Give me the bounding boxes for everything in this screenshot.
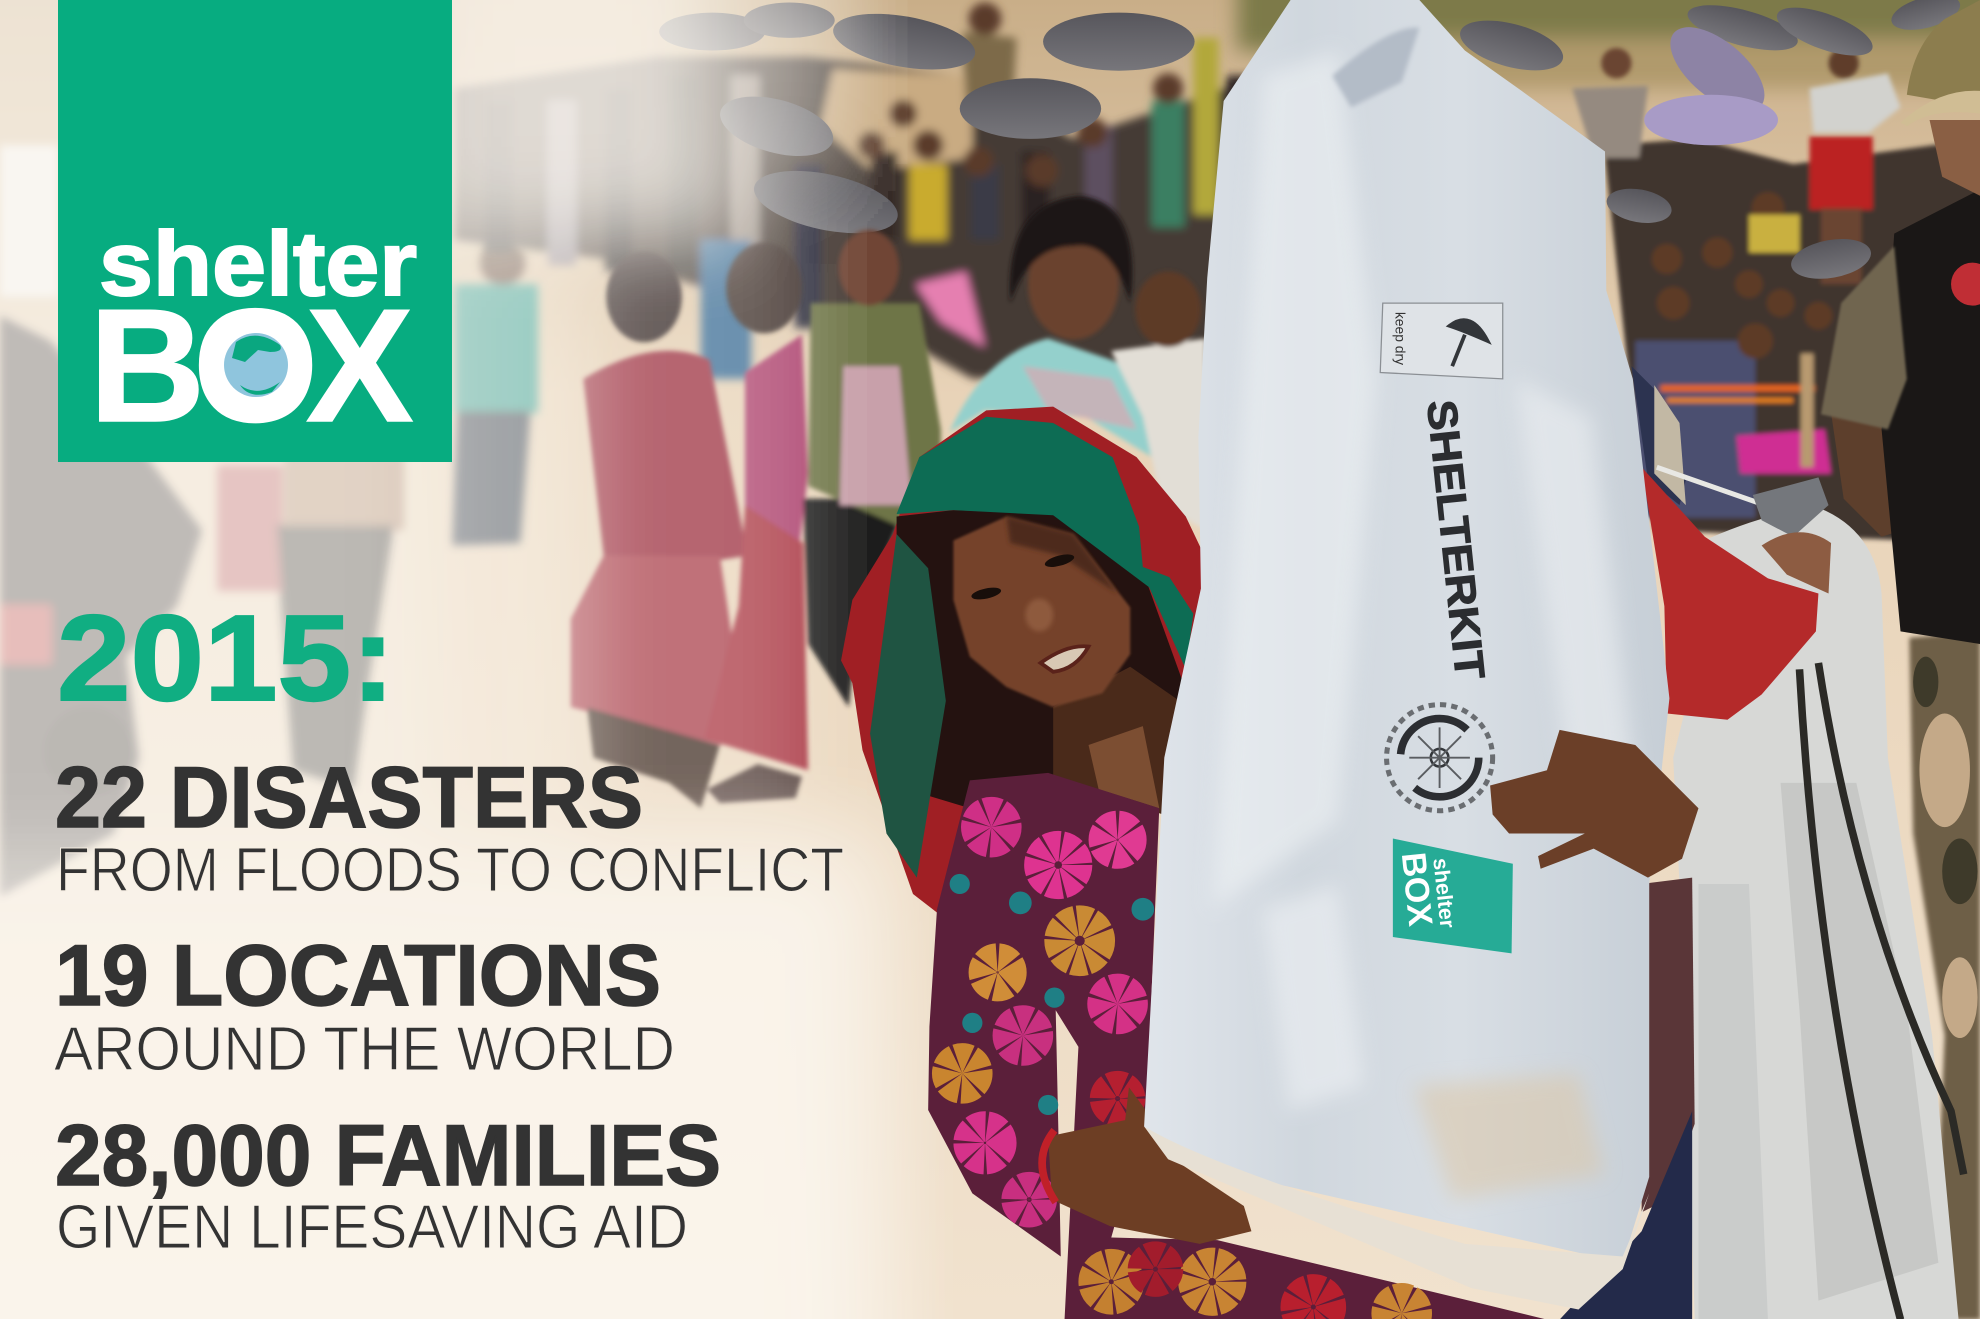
bike wheel — [44, 707, 133, 796]
eyes — [970, 552, 1075, 602]
bag fold shadow — [1332, 28, 1419, 107]
navy cloth — [1560, 1111, 1692, 1319]
white shirt — [1810, 73, 1901, 133]
bag printed panel — [1781, 783, 1938, 1301]
woman in teal blouse — [950, 338, 1158, 461]
patch background — [1393, 838, 1513, 953]
man in white — [1111, 338, 1206, 530]
dark hair — [897, 510, 1183, 808]
stat headline: 22 DISASTERS — [55, 750, 643, 846]
heads — [857, 3, 1183, 187]
woman's head — [606, 251, 682, 342]
soldier forearm — [1830, 404, 1902, 537]
logo word shelter: shelter — [99, 214, 417, 315]
umbrella — [714, 86, 840, 167]
stat caption: FROM FLOODS TO CONFLICT — [56, 836, 844, 905]
patch text shelter: shelter — [1428, 857, 1460, 930]
man in plaid — [1572, 86, 1648, 158]
umbrella purple — [1644, 95, 1778, 145]
SHELTERKIT print: SHELTERKIT — [1418, 398, 1494, 681]
post — [1801, 354, 1813, 467]
stat headline: 19 LOCATIONS — [55, 928, 661, 1024]
neck — [1053, 667, 1179, 815]
left side faded street scene — [0, 145, 538, 897]
second relief bag — [1632, 366, 1964, 1319]
ShelterBox printed patch — [1393, 838, 1513, 953]
floral dress body — [928, 773, 1547, 1319]
pink woman — [1736, 429, 1831, 474]
dirt stain — [1414, 1073, 1604, 1200]
umbrella — [748, 160, 903, 244]
man in teal shirt — [455, 284, 538, 413]
person dark trousers — [275, 524, 394, 789]
printed keep dry box — [1380, 303, 1503, 379]
stat: locations — [54, 928, 675, 1084]
pink woman's skirt — [705, 505, 808, 770]
yellow shirt — [1749, 215, 1799, 253]
umbrella — [960, 78, 1101, 139]
stat headline: 28,000 FAMILIES — [55, 1108, 721, 1204]
bag highlight — [1212, 51, 1376, 909]
bag knot — [1753, 477, 1829, 537]
man on the hill — [962, 32, 1017, 114]
bag body — [1144, 0, 1669, 1263]
pink hats — [916, 272, 985, 347]
stat: disasters — [55, 750, 844, 905]
bag shine — [1263, 884, 1364, 1111]
man's jacket — [808, 303, 941, 530]
crowd mass — [1604, 139, 1980, 543]
man's trousers — [452, 410, 530, 546]
umbrellas — [659, 0, 1964, 285]
orange tape lower — [1667, 398, 1793, 403]
soldier vest — [1882, 189, 1980, 644]
rope — [1818, 663, 1964, 1174]
year heading: 2015: — [57, 590, 395, 726]
standing people columns — [499, 38, 1240, 328]
umbrella — [1455, 11, 1568, 80]
bangle — [1042, 1130, 1056, 1202]
red shorts — [1810, 136, 1873, 210]
umbrella — [1043, 13, 1195, 71]
person behind: dark coat — [1632, 366, 1686, 505]
face shadow — [1006, 516, 1118, 594]
man's head — [838, 230, 899, 306]
stat: families — [55, 1108, 721, 1262]
queue crowd background — [455, 3, 1263, 379]
white fade over left side — [0, 0, 922, 1319]
mouth — [1041, 646, 1089, 672]
person in pink top — [217, 465, 283, 591]
patch text BOX: BOX — [1394, 851, 1439, 928]
man's head — [480, 240, 525, 285]
bag body — [1673, 508, 1959, 1319]
rope — [1799, 669, 1901, 1319]
badge — [1951, 263, 1980, 306]
feet — [707, 764, 802, 803]
main ShelterKit bag — [1144, 0, 1669, 1310]
dress teal print — [950, 874, 1154, 1115]
right crowd background — [1572, 48, 1980, 543]
umbrella icon — [1450, 320, 1488, 366]
teal blouse pink print — [1023, 366, 1137, 429]
umbrella — [1888, 0, 1964, 36]
head — [1829, 48, 1859, 78]
pink woman's head — [726, 242, 802, 333]
bag highlight right — [1515, 379, 1635, 783]
woman's underskirt — [587, 707, 720, 808]
camo patches — [1913, 657, 1978, 1038]
ShelterBox logo panel — [58, 0, 452, 462]
soldier legs camo — [1909, 631, 1980, 1319]
hand on bag — [1490, 730, 1698, 878]
hillside — [1238, 0, 1980, 88]
bag crease shadow — [1698, 884, 1768, 1319]
white strap — [1657, 467, 1758, 503]
legs — [1821, 208, 1861, 284]
bag base panel — [1144, 1126, 1649, 1310]
person beige top — [284, 455, 404, 530]
flowers — [947, 812, 1417, 1319]
keep dry text: keep dry — [1392, 312, 1408, 365]
umbrella — [744, 3, 835, 38]
face — [953, 516, 1130, 707]
Rotary wheel emblem — [1387, 705, 1493, 811]
umbrella — [1604, 184, 1674, 228]
flag shirt — [840, 366, 912, 505]
cap — [1907, 0, 1980, 107]
red bike panel — [0, 606, 51, 663]
person behind: red sleeve — [1642, 467, 1818, 720]
van — [0, 145, 58, 297]
chest — [1089, 726, 1159, 808]
soldier — [1821, 0, 1980, 1319]
scarf green cap — [897, 417, 1193, 669]
seated heads — [1652, 192, 1832, 359]
forearm and hand — [1048, 1087, 1251, 1244]
O counter fill — [216, 315, 296, 415]
queueing people — [571, 196, 1206, 808]
camo sleeve — [1821, 246, 1907, 429]
woman in red blouse — [583, 351, 748, 562]
person behind: beige sleeve — [1654, 385, 1686, 505]
logo background — [58, 0, 452, 462]
man in plaid head — [1601, 48, 1632, 78]
man's head — [1135, 272, 1201, 347]
woman carrying the kit — [841, 407, 1547, 1319]
woman's head — [1028, 229, 1119, 340]
orange tape — [1661, 385, 1815, 391]
stat caption: GIVEN LIFESAVING AID — [56, 1193, 688, 1262]
continents — [232, 336, 281, 362]
blue seated crowd — [1635, 341, 1755, 518]
cap peak — [1901, 91, 1980, 126]
woman's skirt — [571, 556, 739, 745]
woman's hair — [1010, 196, 1132, 303]
person behind: hand on knot — [1762, 532, 1831, 594]
scarf green drape — [870, 534, 946, 878]
nose — [1025, 599, 1053, 631]
woman in pink blouse — [745, 335, 808, 556]
stat caption: AROUND THE WORLD — [54, 1015, 675, 1084]
continents south — [240, 382, 280, 395]
gap of hillside — [821, 69, 972, 170]
motorbikes — [0, 316, 202, 897]
umbrella — [1788, 233, 1874, 285]
umbrella — [829, 4, 979, 79]
umbrella — [1683, 0, 1802, 60]
umbrella — [1771, 0, 1878, 65]
face — [1930, 120, 1980, 196]
scarf red outer — [841, 407, 1210, 916]
logo word BOX: BOX — [89, 276, 413, 456]
keep dry outline — [1380, 303, 1503, 379]
globe — [216, 315, 296, 415]
umbrella purple — [1656, 12, 1779, 127]
man's trousers — [803, 499, 909, 707]
crowd mass — [455, 57, 1263, 379]
patterned skirt behind bag — [1642, 878, 1695, 1212]
globe sphere — [224, 333, 288, 397]
blue jacket — [701, 240, 751, 379]
umbrella — [659, 13, 765, 51]
